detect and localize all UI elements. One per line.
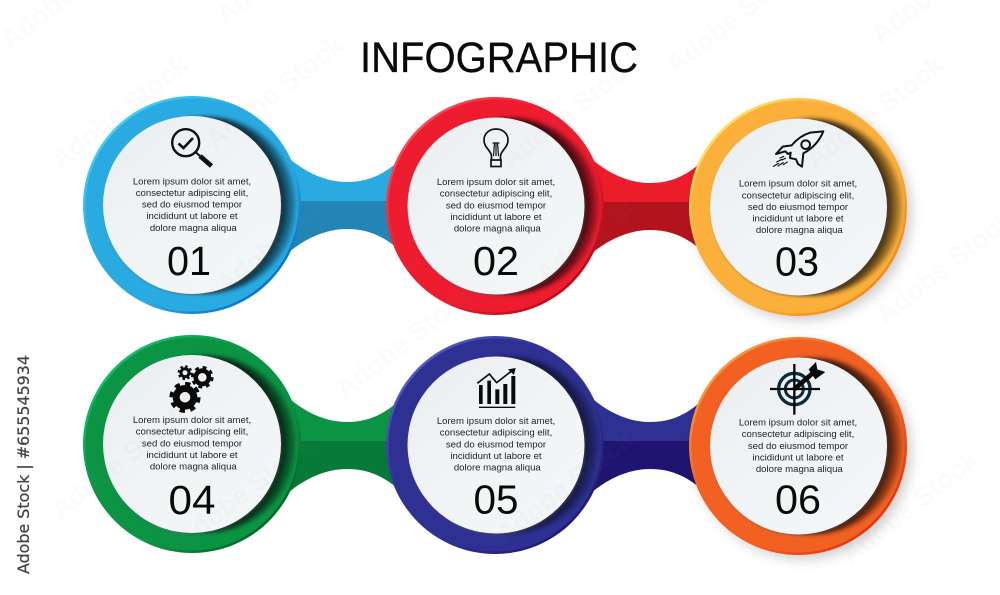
text 01: dolore magna aliqua: [150, 223, 237, 234]
text 02: Lorem ipsum dolor sit amet,: [437, 177, 555, 188]
text 03: sed do eiusmod tempor: [748, 202, 849, 213]
number 06: 06: [775, 476, 821, 522]
text 06: incididunt ut labore et: [752, 452, 844, 464]
stock watermark text: Adobe Stock: [330, 279, 480, 405]
step 06: [689, 337, 911, 559]
ring 01: [83, 96, 301, 314]
text 03: [739, 179, 857, 236]
text 05: [437, 416, 555, 474]
text 04: [133, 415, 251, 472]
icon: magnifier with check: [172, 129, 212, 166]
step 04: [83, 335, 301, 553]
text 06: dolore magna aliqua: [756, 464, 843, 475]
text 01: sed do eiusmod tempor: [142, 200, 243, 211]
text 02: dolore magna aliqua: [454, 224, 541, 234]
text 01: incididunt ut labore et: [146, 211, 238, 222]
icon: rocket: [773, 131, 823, 167]
connector: 01 to 02: [280, 150, 405, 260]
text 04: consectetur adipiscing elit,: [136, 427, 248, 438]
disc 02: [408, 118, 586, 296]
ring 02: [386, 97, 604, 315]
number 03: 03: [775, 238, 819, 284]
text 04: dolore magna aliqua: [150, 462, 237, 472]
text 05: incididunt ut labore et: [450, 451, 542, 462]
text 03: consectetur adipiscing elit,: [742, 190, 854, 201]
text 02: sed do eiusmod tempor: [446, 200, 547, 211]
stock watermark text: Adobe Stock: [170, 429, 320, 555]
disc 06: [710, 358, 888, 536]
step 01: [83, 96, 301, 314]
ring 04: [83, 335, 301, 553]
title: INFOGRAPHIC: [360, 34, 638, 82]
text 02: incididunt ut labore et: [450, 212, 542, 223]
text 03: incididunt ut labore et: [752, 214, 844, 225]
stock watermark text: Adobe Stock: [45, 49, 195, 175]
text 01: [133, 176, 251, 234]
connector: 02 to 03: [583, 151, 708, 261]
text 05: sed do eiusmod tempor: [446, 439, 547, 450]
ring 06: [689, 337, 907, 555]
text 03: dolore magna aliqua: [756, 225, 843, 236]
text 06: [739, 418, 857, 475]
stock watermark text: Adobe Stock: [200, 29, 350, 155]
step 05: [386, 336, 604, 554]
icon: rising bar chart: [477, 368, 516, 408]
text 05: dolore magna aliqua: [454, 462, 541, 474]
text 04: Lorem ipsum dolor sit amet,: [133, 415, 251, 426]
text 02: [437, 177, 555, 234]
text 05: Lorem ipsum dolor sit amet,: [437, 416, 555, 427]
stock watermark text: Adobe Stock: [800, 49, 950, 175]
disc 04: [103, 355, 282, 534]
soft outer shadow 06: [695, 343, 911, 559]
stock id label: Adobe Stock | #655545934: [14, 355, 33, 574]
stock watermark text: Adobe Stock: [490, 424, 640, 550]
step 02: [386, 97, 604, 315]
text 01: Lorem ipsum dolor sit amet,: [133, 176, 251, 187]
number 05: 05: [474, 476, 518, 522]
text 01: consectetur adipiscing elit,: [136, 188, 248, 199]
text 05: consectetur adipiscing elit,: [440, 428, 552, 439]
text 03: Lorem ipsum dolor sit amet,: [739, 179, 857, 190]
number 04: 04: [168, 477, 216, 523]
stock watermark text: Adobe Stock: [495, 49, 645, 175]
ring 03: [689, 98, 907, 316]
text 06: consectetur adipiscing elit,: [742, 429, 854, 440]
text 02: consectetur adipiscing elit,: [440, 189, 552, 200]
disc 03: [710, 118, 888, 296]
soft outer shadow 03: [695, 104, 911, 320]
icon: target with arrow: [770, 362, 825, 415]
connector: 05 to 06: [583, 390, 708, 500]
text 04: incididunt ut labore et: [146, 450, 238, 461]
text 06: Lorem ipsum dolor sit amet,: [739, 418, 857, 429]
icon: gears: [171, 366, 212, 411]
connector: 04 to 05: [280, 390, 405, 500]
number 01: 01: [167, 238, 211, 284]
stock watermark text: Adobe Stock: [530, 164, 680, 290]
text 06: sed do eiusmod tempor: [748, 441, 849, 452]
icon: light bulb: [484, 129, 508, 166]
stock watermark text: Adobe Stock: [210, 174, 360, 300]
disc 05: [408, 356, 586, 534]
stock watermark text: Adobe Stock: [45, 399, 195, 525]
stock watermark text: Adobe Stock: [835, 444, 985, 570]
disc 01: [103, 116, 282, 295]
step 03: [689, 98, 911, 320]
text 04: sed do eiusmod tempor: [142, 438, 243, 449]
ring 05: [386, 336, 604, 554]
number 02: 02: [473, 238, 519, 284]
